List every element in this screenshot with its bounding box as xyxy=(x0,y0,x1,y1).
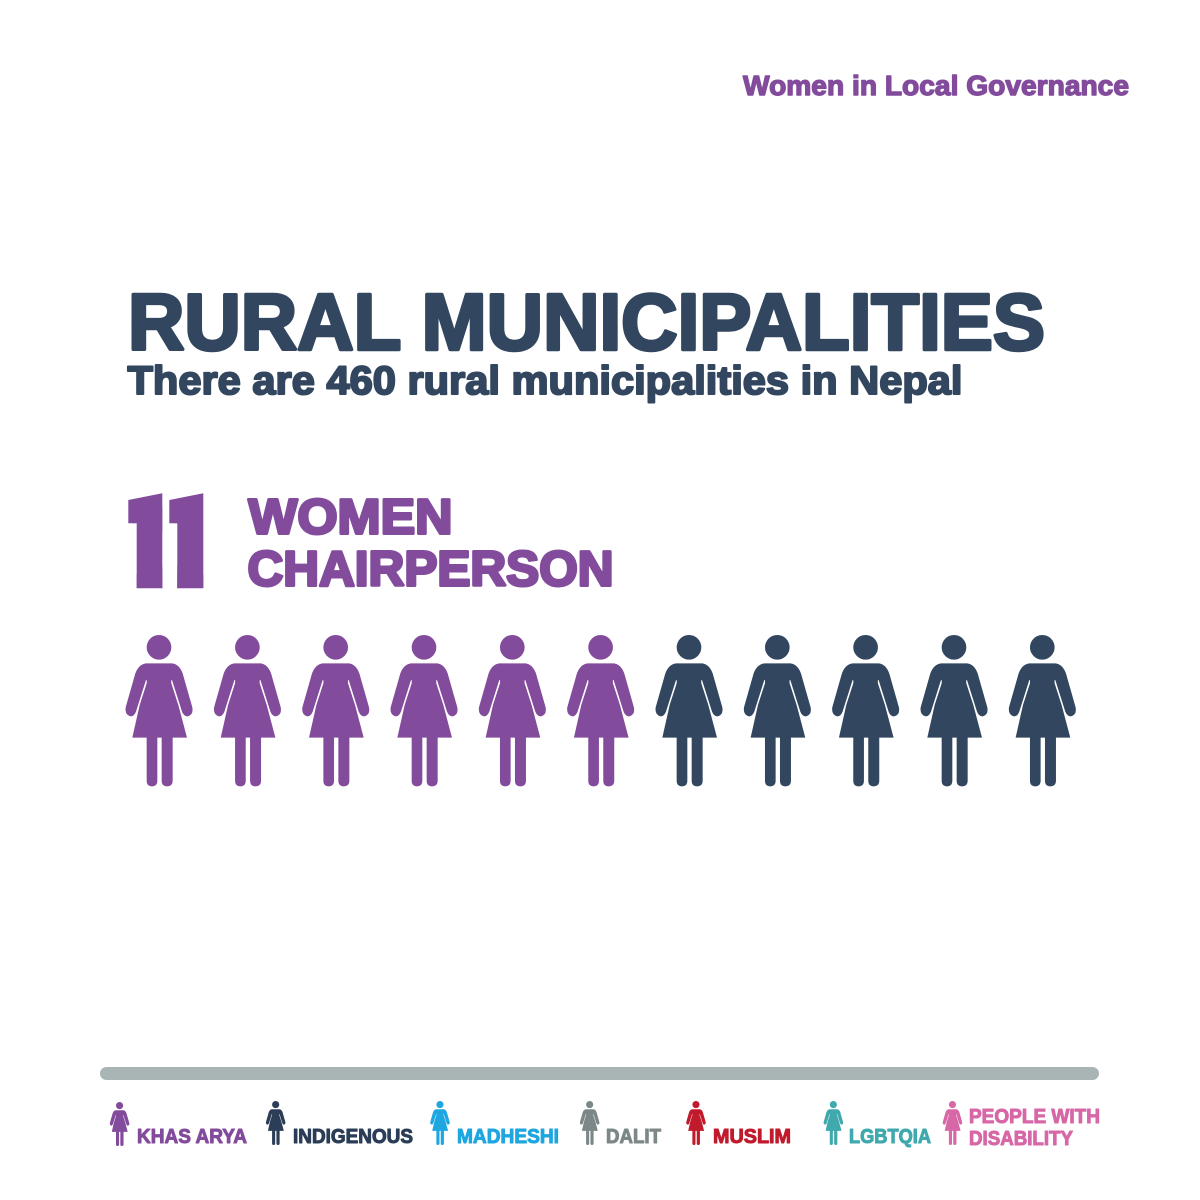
icon: woman 1 khas arya xyxy=(126,635,193,786)
legend xyxy=(110,1101,1100,1150)
legend item: khas arya: KHAS ARYA xyxy=(137,1126,247,1148)
icon: woman 6 khas arya xyxy=(567,635,634,786)
label: women chairperson xyxy=(248,490,614,596)
legend item: madheshi xyxy=(430,1101,559,1148)
legend item: people with disability: PEOPLE WITH xyxy=(969,1106,1100,1128)
top-right series title: Women in Local Governance xyxy=(743,70,1129,101)
legend item: indigenous xyxy=(266,1101,413,1148)
legend item: lgbtqia: LGBTQIA xyxy=(849,1126,931,1148)
icon: woman 4 khas arya xyxy=(391,635,458,786)
legend item: people with disability xyxy=(943,1101,1100,1150)
main heading: RURAL MUNICIPALITIES xyxy=(128,278,1045,366)
icon: woman 10 indigenous xyxy=(921,635,988,786)
label: women chairperson: CHAIRPERSON xyxy=(248,542,614,596)
icon: woman 8 indigenous xyxy=(744,635,811,786)
legend item: muslim: MUSLIM xyxy=(713,1126,791,1148)
legend item: lgbtqia xyxy=(824,1101,931,1148)
pictogram row of eleven women xyxy=(126,635,1076,786)
label: women chairperson: WOMEN xyxy=(248,490,452,544)
icon: woman 2 khas arya xyxy=(214,635,281,786)
legend item: dalit: DALIT xyxy=(606,1126,661,1148)
legend item: muslim xyxy=(686,1101,791,1148)
icon: woman 5 khas arya xyxy=(479,635,546,786)
legend item: indigenous: INDIGENOUS xyxy=(293,1126,413,1148)
legend item: people with disability: DISABILITY xyxy=(969,1128,1074,1150)
legend item: dalit xyxy=(580,1101,661,1148)
icon: woman 11 indigenous xyxy=(1009,635,1076,786)
subheading: There are 460 rural municipalities in Nepal xyxy=(128,359,962,403)
legend item: khas arya xyxy=(110,1102,247,1148)
legend item: madheshi: MADHESHI xyxy=(457,1126,559,1148)
icon: woman 7 indigenous xyxy=(656,635,723,786)
big number 11: 11 xyxy=(128,469,209,617)
icon: woman 9 indigenous xyxy=(832,635,899,786)
icon: woman 3 khas arya xyxy=(302,635,369,786)
legend divider bar xyxy=(100,1067,1099,1080)
